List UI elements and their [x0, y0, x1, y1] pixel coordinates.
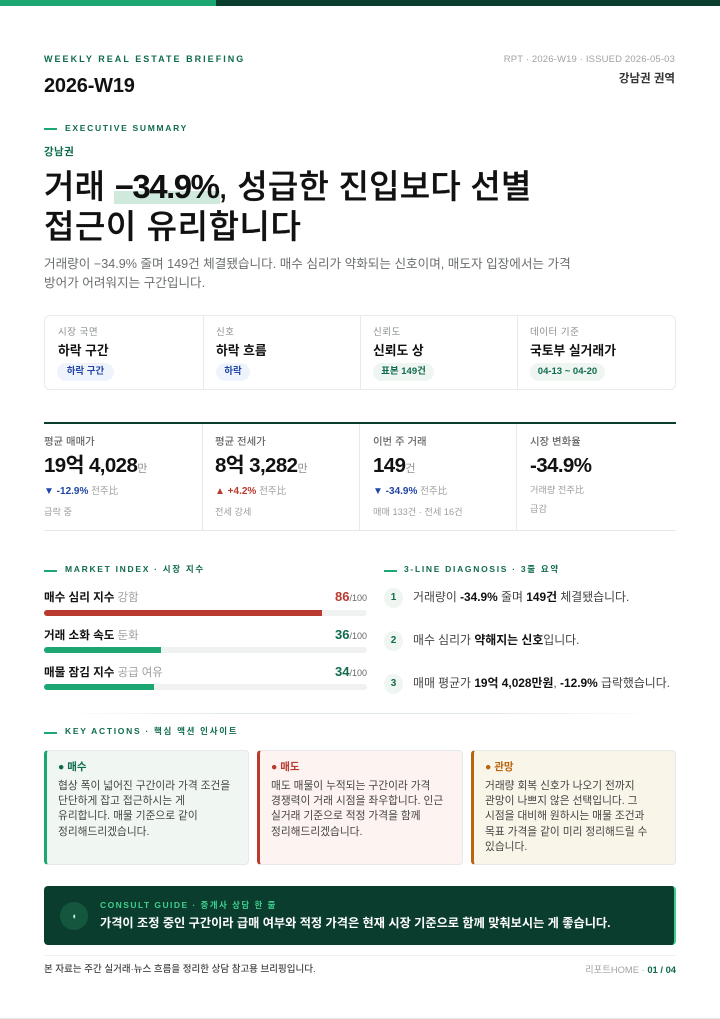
- section label: market index: MARKET INDEX · 시장 지수: [65, 564, 205, 574]
- index bar: deal speed: [44, 627, 367, 653]
- diagnosis 1: 거래량이 -34.9% 줄며 149건 체결됐습니다.: [413, 590, 629, 604]
- card: sell: 경쟁력이 거래 시점을 좌우합니다. 인근: [271, 795, 443, 807]
- summary text: [44, 257, 571, 290]
- section label: 3-line diagnosis: 3-LINE DIAGNOSIS · 3줄 요약: [404, 564, 560, 574]
- panel: key metrics: 8억 3,282만: [215, 454, 308, 477]
- panel: key metrics: 매매 133건 · 전세 16건: [373, 507, 463, 517]
- consult guide banner: [44, 886, 676, 945]
- summary text: 거래량이 −34.9% 줄며 149건 체결됐습니다. 매수 심리가 약화되는 신호이며, 매도자 입장에서는 가격: [44, 257, 571, 271]
- report meta: RPT · 2026-W19 · ISSUED 2026-05-03: [504, 54, 675, 65]
- headline: [44, 168, 532, 245]
- card: buy: ● 매수: [58, 761, 87, 773]
- region tag: 강남권: [44, 146, 74, 158]
- header eyebrow: WEEKLY REAL ESTATE BRIEFING: [44, 54, 245, 64]
- headline: 접근이 유리합니다: [44, 208, 301, 245]
- consult message: 가격이 조정 중인 구간이라 급매 여부와 적정 가격은 현재 시장 기준으로 함께 맞춰보시는 게 좋습니다.: [100, 916, 611, 930]
- card: wait: 관망이 나쁘지 않은 선택입니다. 그: [485, 795, 638, 807]
- headline: 거래 −34.9%, 성급한 진입보다 선별: [44, 168, 532, 205]
- card: sell: [257, 750, 463, 865]
- metric: weekly deals: 이번 주 거래: [373, 437, 427, 448]
- panel: key metrics: ▼ -12.9% 전주比: [44, 486, 118, 497]
- report week title: 2026-W19: [44, 75, 135, 97]
- panel: market status strip: 신뢰도 상: [373, 343, 424, 358]
- card: wait: ● 관망: [485, 761, 514, 773]
- panel: market status strip: 04-13 ~ 04-20: [538, 366, 597, 377]
- card: buy: [44, 750, 249, 865]
- card: wait: 목표 가격을 같이 미리 정리해드릴 수: [485, 826, 647, 838]
- card: wait: [471, 750, 676, 865]
- summary text: 방어가 어려워지는 구간입니다.: [44, 276, 205, 290]
- index bar: listing lock-in: [44, 664, 367, 690]
- metric: average jeonse price: 평균 전세가: [215, 437, 266, 448]
- panel: market status strip: 하락 흐름: [216, 343, 267, 358]
- card: buy: 협상 폭이 넓어진 구간이라 가격 조건을: [58, 780, 230, 792]
- panel: key metrics: ▲ +4.2% 전주比: [215, 486, 286, 497]
- panel: market status strip: 신호: [216, 326, 234, 338]
- index bar: buying sentiment: [44, 589, 367, 616]
- panel: market status strip: 표본 149건: [381, 366, 426, 377]
- diagnosis 2: 매수 심리가 약해지는 신호입니다.: [413, 633, 579, 647]
- diagnosis 2: [384, 631, 579, 651]
- panel: key metrics: ▼ -34.9% 전주比: [373, 486, 447, 497]
- diagnosis 1: [384, 588, 629, 608]
- panel: market status strip: 시장 국면: [58, 326, 98, 338]
- page number: 리포트HOME · 01 / 04: [585, 964, 676, 975]
- panel: key metrics: [44, 422, 676, 531]
- card: sell: ● 매도: [271, 761, 300, 773]
- index bar: buying sentiment: 매수 심리 지수 강함: [44, 591, 139, 604]
- section label: key actions: KEY ACTIONS · 핵심 액션 인사이트: [65, 726, 238, 736]
- panel: market status strip: 신뢰도: [373, 326, 401, 338]
- card: wait: 시점을 대비해 원하시는 매물 조건과: [485, 810, 644, 822]
- panel: key metrics: 19억 4,028만: [44, 454, 147, 477]
- panel: key metrics: 전세 강세: [215, 507, 251, 517]
- diagnosis 1: 1: [391, 592, 396, 603]
- card: wait: 있습니다.: [485, 841, 527, 853]
- card: buy: 유리합니다. 매물 기준으로 같이: [58, 810, 198, 822]
- index bar: buying sentiment: 86/100: [335, 589, 367, 604]
- panel: market status strip: 하락 구간: [67, 366, 104, 377]
- index bar: deal speed: 거래 소화 속도 둔화: [44, 629, 139, 642]
- index bar: listing lock-in: 매물 잠김 지수 공급 여유: [44, 666, 163, 679]
- icon: moon: ◖: [71, 911, 77, 921]
- card: sell: 매도 매물이 누적되는 구간이라 가격: [271, 780, 430, 792]
- top accent bar: [0, 0, 720, 6]
- card: buy: 단단하게 잡고 접근하시는 게: [58, 795, 185, 807]
- panel: market status strip: 하락: [224, 366, 242, 377]
- section label: executive summary: EXECUTIVE SUMMARY: [65, 123, 188, 133]
- panel: key metrics: 거래량 전주比: [530, 485, 584, 495]
- panel: market status strip: [44, 315, 676, 390]
- footer note: 본 자료는 주간 실거래·뉴스 흐름을 정리한 상담 참고용 브리핑입니다.: [44, 964, 316, 975]
- diagnosis 3: [384, 674, 670, 694]
- panel: key metrics: -34.9%: [530, 454, 591, 477]
- panel: market status strip: 국토부 실거래가: [530, 343, 616, 358]
- footer: [44, 955, 676, 979]
- diagnosis 3: 매매 평균가 19억 4,028만원, -12.9% 급락했습니다.: [413, 676, 670, 690]
- metric: average sale price: 평균 매매가: [44, 437, 95, 448]
- panel: key metrics: 149건: [373, 454, 416, 477]
- region label: 강남권 권역: [619, 73, 675, 85]
- panel: key metrics: 급감: [530, 504, 547, 514]
- panel: key metrics: 급락 중: [44, 507, 72, 517]
- index bar: deal speed: 36/100: [335, 627, 367, 642]
- icon: moon: [60, 902, 88, 930]
- diagnosis 3: 3: [391, 678, 396, 689]
- card: sell: 실거래 기준으로 적정 가격을 함께: [271, 810, 421, 822]
- card: sell: 정리해드리겠습니다.: [271, 826, 362, 838]
- consult label: CONSULT GUIDE · 중개사 상담 한 줄: [100, 900, 277, 910]
- panel: market status strip: 데이터 기준: [530, 326, 579, 338]
- card: buy: 정리해드리겠습니다.: [58, 826, 149, 838]
- panel: market status strip: 하락 구간: [58, 343, 109, 358]
- card: wait: 거래량 회복 신호가 나오기 전까지: [485, 780, 635, 792]
- index bar: listing lock-in: 34/100: [335, 664, 367, 679]
- diagnosis 2: 2: [391, 635, 396, 646]
- metric: market change rate: 시장 변화율: [530, 437, 581, 448]
